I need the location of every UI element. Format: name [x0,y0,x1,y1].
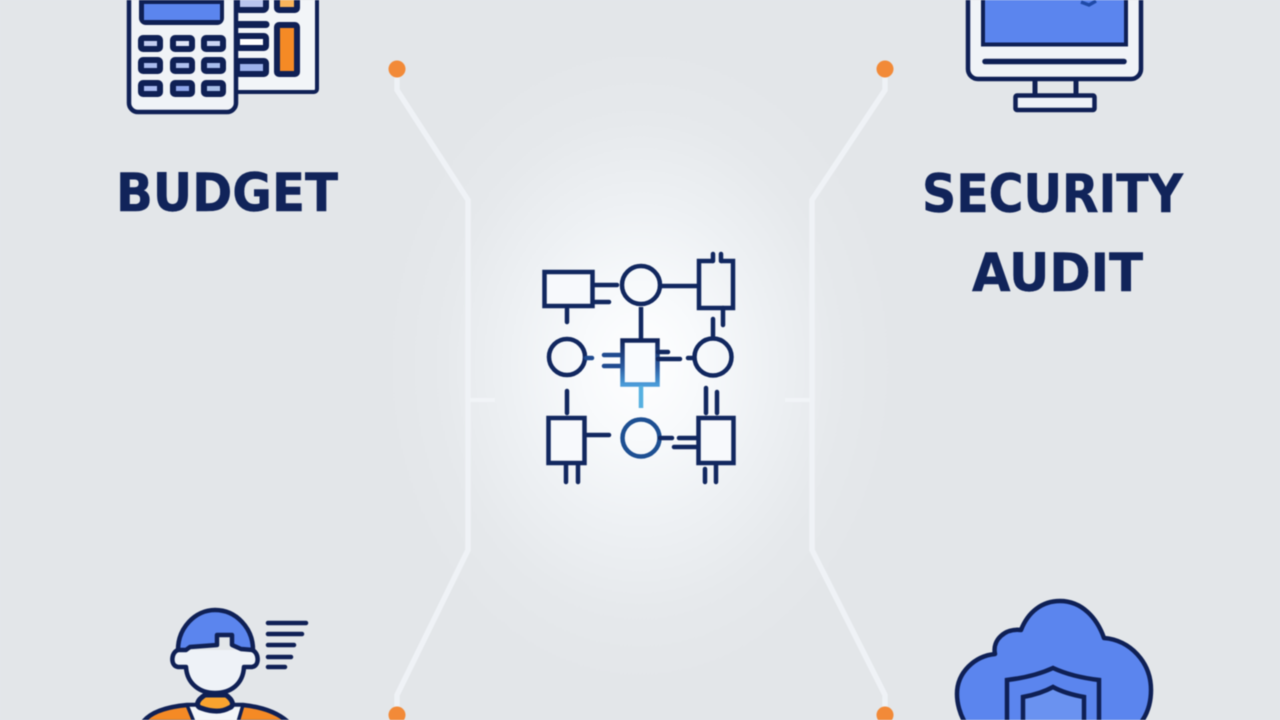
links: top left box [567,285,617,322]
icon: calculator and spreadsheet [129,0,317,112]
connector stub: right centre [785,398,810,402]
motion lines [268,623,306,667]
connector stub: left centre [470,398,495,402]
node: middle right circle [694,338,732,376]
heading: security audit [922,164,1184,304]
links: middle left [586,355,620,366]
link: top row [660,284,697,288]
node: top left box [544,272,592,306]
link: centre box to bottom circle [639,386,643,408]
face and ears [172,650,258,693]
links: top right box [713,254,723,325]
connector: top right [812,60,894,400]
links: centre box [658,352,680,359]
heading: security audit: SECURITY [922,164,1184,225]
connector: bottom right [812,400,894,720]
heading: security audit: AUDIT [972,243,1143,304]
shoulders [143,705,288,720]
node: top centre circle [622,266,660,304]
shield [1007,668,1099,720]
links: middle right [688,319,713,358]
link: centre vertical [639,307,643,339]
node: bottom right box [698,418,734,463]
icon: computer monitor [968,0,1141,110]
links: bottom left box [566,391,609,482]
connector: bottom left [388,400,468,720]
icon: central network diagram [544,254,734,482]
node: centre box [622,340,658,384]
connector: top left [388,60,468,400]
links: bottom right box [705,388,717,482]
links: bottom centre [660,438,696,447]
heading: budget: BUDGET [116,163,338,224]
node: top right box [699,261,733,308]
node: bottom left box [548,418,584,463]
node: bottom centre circle [622,420,660,456]
icon: cloud with shield [957,601,1151,720]
icon: engineer with helmet [143,610,306,720]
helmet [178,610,253,650]
collar [198,695,233,711]
node: middle left circle [549,339,585,375]
